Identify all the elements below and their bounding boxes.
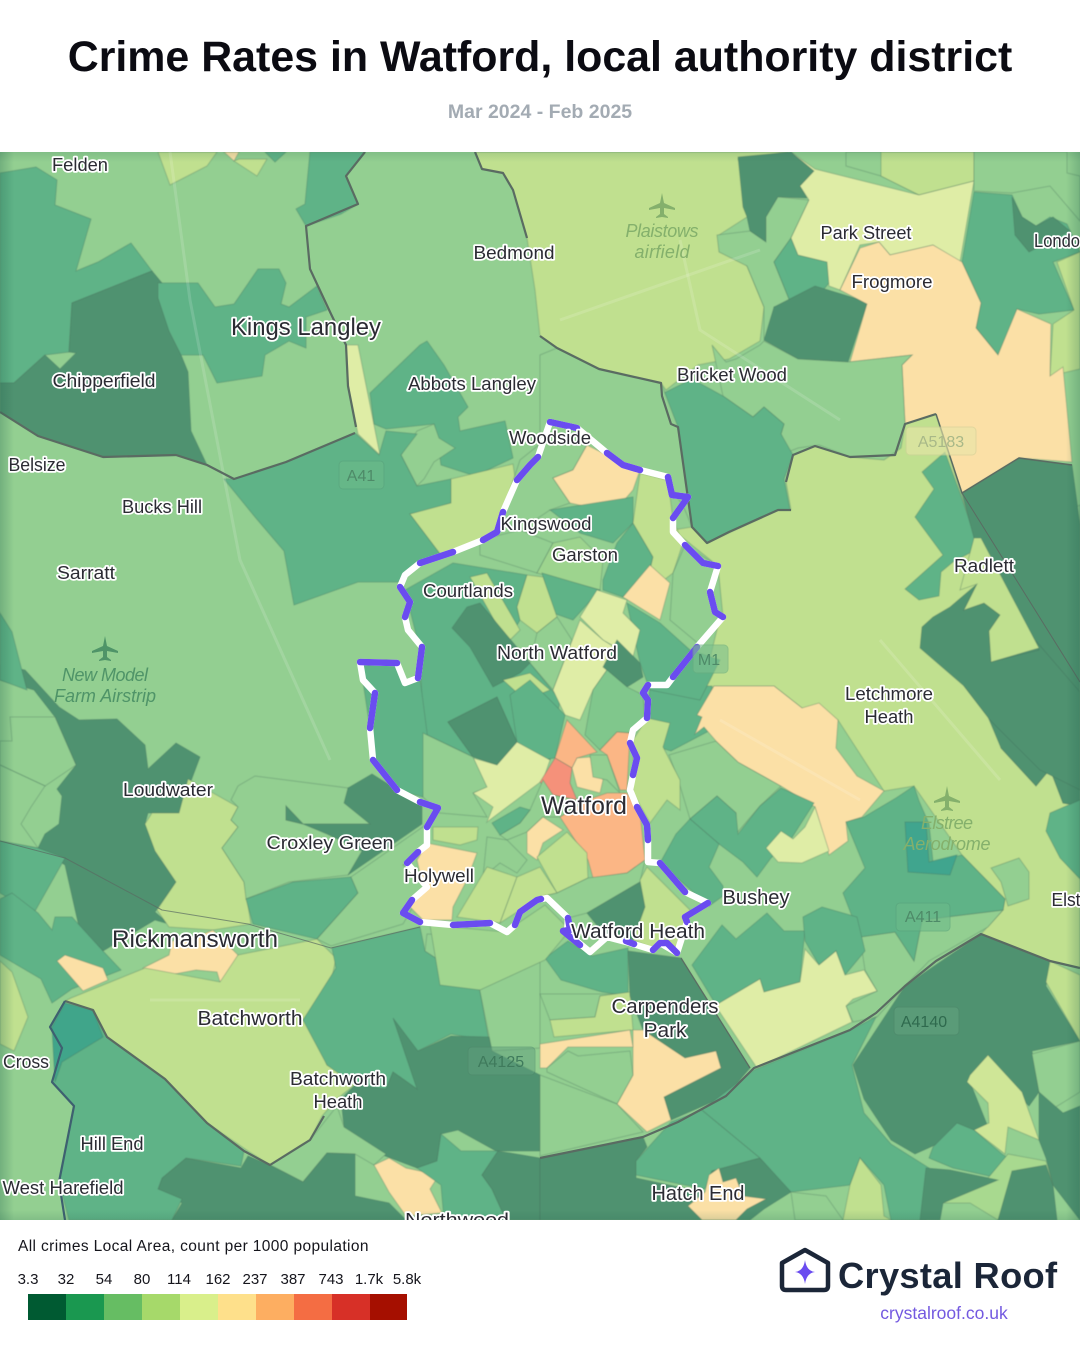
place name labels: Kingswood (500, 514, 592, 534)
road labels: A5183 (918, 434, 964, 451)
place name labels: Heath (864, 707, 914, 727)
legend tick labels (18, 1271, 422, 1288)
place name labels: Felden (52, 155, 108, 175)
legend: 54 (96, 1271, 112, 1288)
date range subtitle: Mar 2024 - Feb 2025 (448, 101, 632, 123)
place name labels: Cross (3, 1052, 49, 1072)
icon: New Model Farm plane (92, 636, 118, 661)
brand name: Crystal Roof (838, 1255, 1057, 1296)
place name labels: North Watford (497, 643, 617, 663)
airfield labels: airfield (634, 242, 690, 262)
place name labels: Kings Langley (231, 314, 381, 341)
place name labels: Courtlands (423, 581, 513, 601)
place name labels: Carpenders (612, 996, 718, 1018)
legend: 387 (280, 1271, 306, 1288)
icon: Crystal Roof house logo (780, 1248, 830, 1292)
place name labels: Rickmansworth (112, 926, 278, 953)
place name labels: Belsize (8, 455, 66, 475)
legend: 5.8k (393, 1271, 421, 1288)
place name labels: Croxley Green (266, 833, 394, 853)
road labels: A41 (347, 468, 375, 485)
legend: 3.3 (18, 1271, 38, 1288)
road labels: M1 (698, 652, 720, 669)
airfield labels (54, 221, 990, 854)
place name labels: Bedmond (474, 243, 554, 263)
place name labels: Radlett (954, 556, 1014, 576)
place name labels: Woodside (509, 428, 591, 448)
website: crystalroof.co.uk (880, 1303, 1008, 1323)
airfield labels: Aerodrome (902, 834, 990, 854)
district border lines (0, 152, 1080, 1220)
airfield labels: New Model (62, 665, 149, 685)
airfield labels: Farm Airstrip (54, 686, 156, 706)
legend: 743 (318, 1271, 344, 1288)
place name labels: Heath (314, 1092, 362, 1112)
place name labels: Hatch End (652, 1183, 744, 1205)
place name labels: Watford (541, 792, 627, 820)
place name labels: Frogmore (852, 272, 932, 292)
place name labels: Sarratt (57, 563, 115, 583)
place name labels: Holywell (404, 866, 474, 886)
place name labels: Loudwater (123, 780, 213, 800)
place name labels: Park (644, 1020, 688, 1042)
icon: Elstree plane (934, 786, 960, 811)
road labels: A4125 (478, 1054, 524, 1071)
map edge vignette (0, 152, 1080, 1220)
borough boundary, white with purple dashes (360, 422, 723, 953)
place name labels: Northwood (405, 1210, 509, 1230)
airfield labels: Elstree (921, 813, 973, 833)
place name labels: Letchmore (845, 684, 933, 704)
place name labels: Park Street (820, 223, 912, 243)
place name labels: Chipperfield (52, 371, 156, 391)
legend (18, 1238, 422, 1320)
legend: 32 (58, 1271, 74, 1288)
legend: 80 (134, 1271, 150, 1288)
legend: 114 (167, 1271, 191, 1288)
place name labels: Batchworth (290, 1069, 386, 1089)
choropleth crime-rate areas (0, 152, 1080, 1220)
place name labels: Garston (552, 545, 618, 565)
legend: 1.7k (355, 1271, 383, 1288)
place name labels: Batchworth (198, 1008, 302, 1030)
place name labels: Bricket Wood (677, 365, 787, 385)
place name labels: Hill End (80, 1134, 144, 1154)
road labels: A4140 (901, 1014, 947, 1031)
road labels: A411 (905, 909, 941, 926)
legend title: All crimes Local Area, count per 1000 population (18, 1238, 369, 1255)
legend: 237 (242, 1271, 268, 1288)
place name labels: Watford Heath (571, 921, 705, 943)
legend colour scale (28, 1294, 407, 1320)
map panel (0, 152, 1080, 1220)
title: Crime Rates in Watford, local authority district (68, 33, 1012, 81)
place name labels: Bucks Hill (122, 497, 202, 517)
place name labels: West Harefield (2, 1178, 124, 1198)
icon: Plaistows airfield plane (649, 193, 675, 218)
place name labels: Bushey (722, 887, 790, 909)
place name labels (2, 155, 1080, 1230)
road labels (339, 427, 976, 1075)
legend: 162 (205, 1271, 231, 1288)
airfield labels: Plaistows (626, 221, 698, 241)
place name labels: Abbots Langley (408, 374, 536, 394)
